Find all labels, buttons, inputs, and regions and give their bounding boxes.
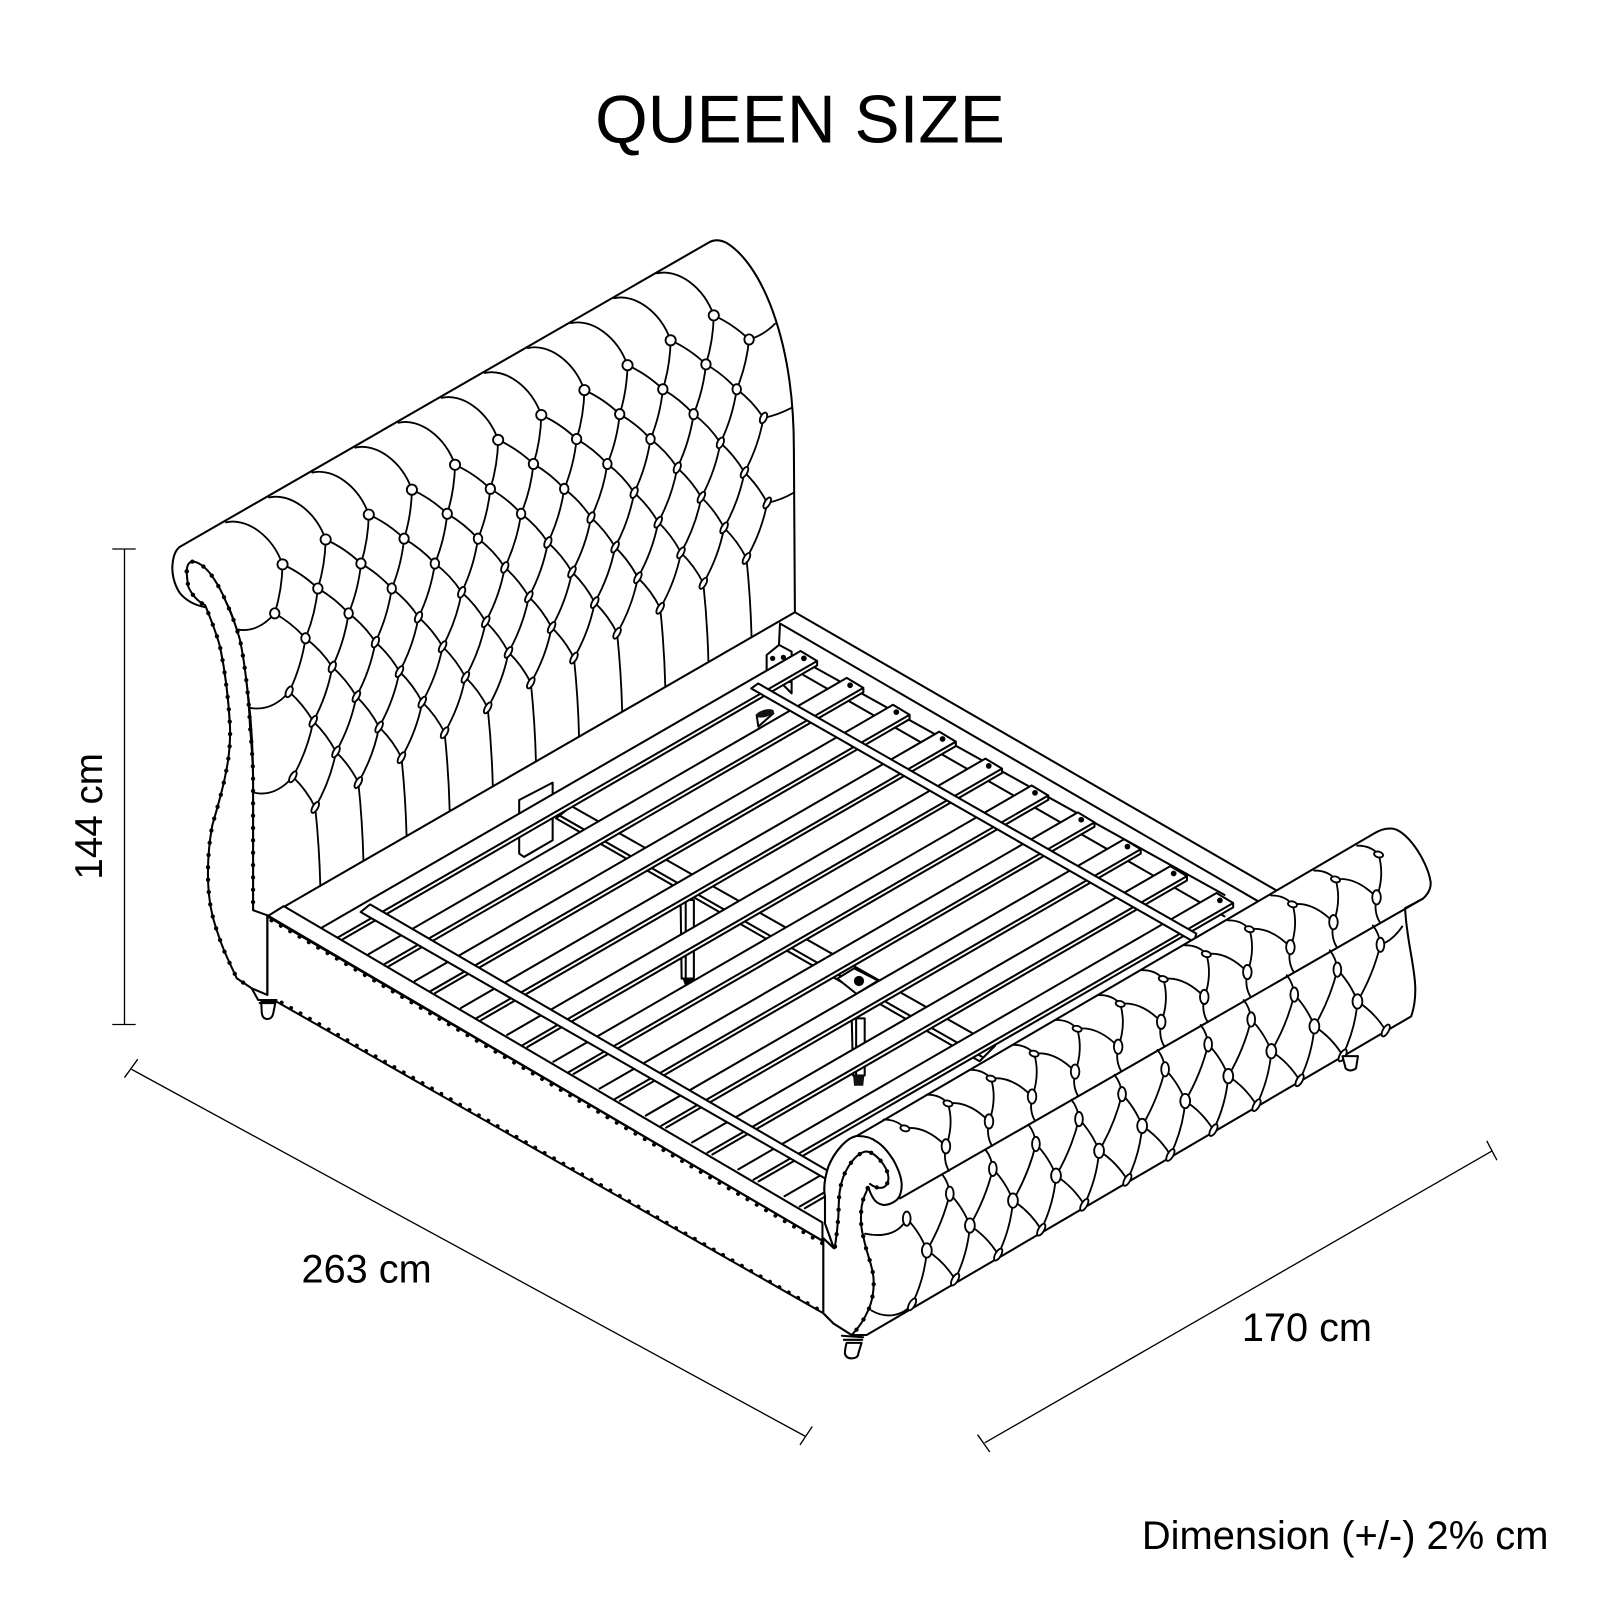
height dimension line [68,549,136,1024]
bed illustration [172,240,1431,1358]
far side rail [779,612,1281,916]
front cross bar [361,904,827,1180]
left scroll arm with nail trim [187,562,267,995]
front side rail [267,906,823,1313]
tolerance note: Dimension (+/-) 2% cm [1142,1514,1548,1558]
footboard outline [823,828,1431,1335]
side bracket [519,783,553,857]
footboard [823,828,1431,1358]
front foot [842,1336,863,1358]
left foot [252,988,277,1019]
length dimension line [124,1059,812,1445]
width label: 170 cm [1242,1306,1372,1350]
right foot [1342,1056,1358,1070]
support leg two [852,1018,865,1086]
headboard outline [172,240,795,916]
title: QUEEN SIZE [595,82,1005,157]
centre bolt plate [837,968,878,994]
width dimension line [978,1141,1497,1452]
corner bracket [767,645,792,693]
headboard tufting [226,273,793,886]
footboard roll line [900,899,1423,1198]
footboard scroll with nail trim [823,1136,902,1335]
height label: 144 cm [68,753,111,880]
footboard tufting rows [865,846,1402,1315]
headboard [172,240,795,1019]
far cross bar [751,683,1196,942]
support leg one [681,900,694,988]
length label: 263 cm [302,1248,432,1292]
dark leg detail [755,708,775,727]
centre support beam [556,806,995,1061]
slats [322,651,1279,1208]
